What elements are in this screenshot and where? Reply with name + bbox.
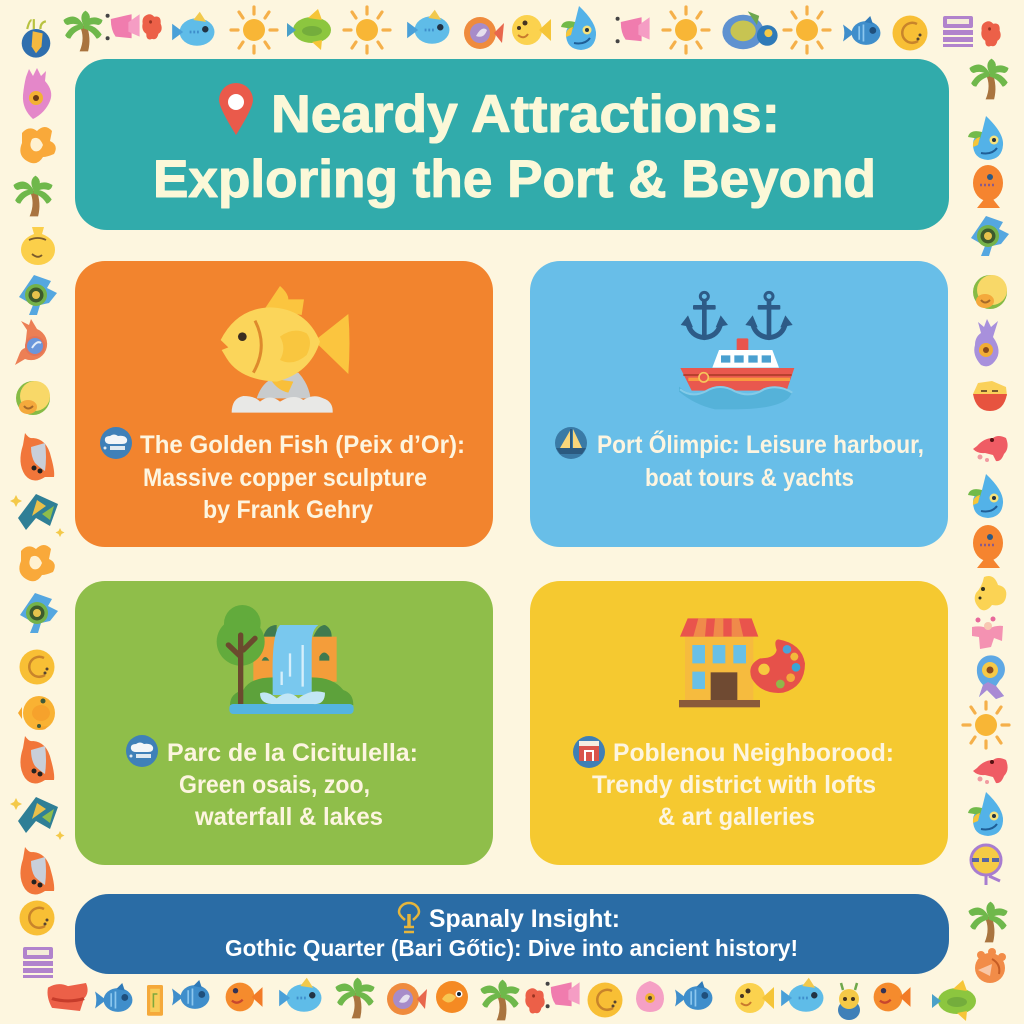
icon: cloud badge bbox=[100, 427, 132, 459]
border: top row icons bbox=[22, 6, 1001, 58]
icon: storefront badge bbox=[573, 736, 605, 768]
card text: The Golden Fish (Peix d’Or): bbox=[140, 431, 465, 459]
card text: boat tours & yachts bbox=[645, 464, 854, 492]
card text: Parc de la Cicitulella: bbox=[167, 739, 418, 767]
insight heading: Spanaly Insight: bbox=[429, 905, 620, 933]
icon: cloud badge bbox=[126, 735, 158, 767]
border: left column icons bbox=[10, 68, 64, 978]
insight text: Gothic Quarter (Bari Gőtic): Dive into ancient history! bbox=[225, 935, 798, 961]
icon: map pin bbox=[219, 83, 253, 135]
panel: insight banner bbox=[75, 894, 949, 974]
border: bottom row icons bbox=[48, 978, 976, 1021]
panel: The Golden Fish bbox=[75, 261, 493, 547]
card text: Poblenou Neighborood: bbox=[613, 739, 894, 767]
icon: golden fish sculpture bbox=[221, 286, 349, 413]
panel: Port Olimpic bbox=[530, 261, 948, 547]
card text: Port Őlimpic: Leisure harbour, bbox=[597, 430, 924, 459]
title line 2: Exploring the Port & Beyond bbox=[153, 150, 876, 209]
card text: Massive copper sculpture bbox=[143, 464, 427, 492]
card text: & art galleries bbox=[658, 803, 815, 831]
panel: Parc de la Ciutadella bbox=[75, 581, 493, 865]
card text bbox=[140, 431, 465, 524]
border: right column icons bbox=[963, 59, 1009, 983]
icon: park waterfall bbox=[217, 605, 354, 714]
card text: Green osais, zoo, bbox=[179, 771, 370, 799]
icon: light bulb bbox=[399, 903, 419, 932]
title line 1: Neardy Attractions: bbox=[271, 85, 780, 144]
icon: building and palette bbox=[679, 618, 805, 707]
panel: title banner bbox=[75, 59, 949, 230]
card text bbox=[167, 739, 418, 831]
icon: anchors and boat bbox=[679, 292, 794, 409]
card text: Trendy district with lofts bbox=[592, 771, 876, 799]
card text bbox=[592, 739, 894, 831]
card text: waterfall & lakes bbox=[194, 803, 383, 831]
icon: sailboat badge bbox=[555, 427, 587, 459]
card text bbox=[597, 430, 924, 492]
card text: by Frank Gehry bbox=[203, 496, 373, 524]
panel: Poblenou Neighbourhood bbox=[530, 581, 948, 865]
